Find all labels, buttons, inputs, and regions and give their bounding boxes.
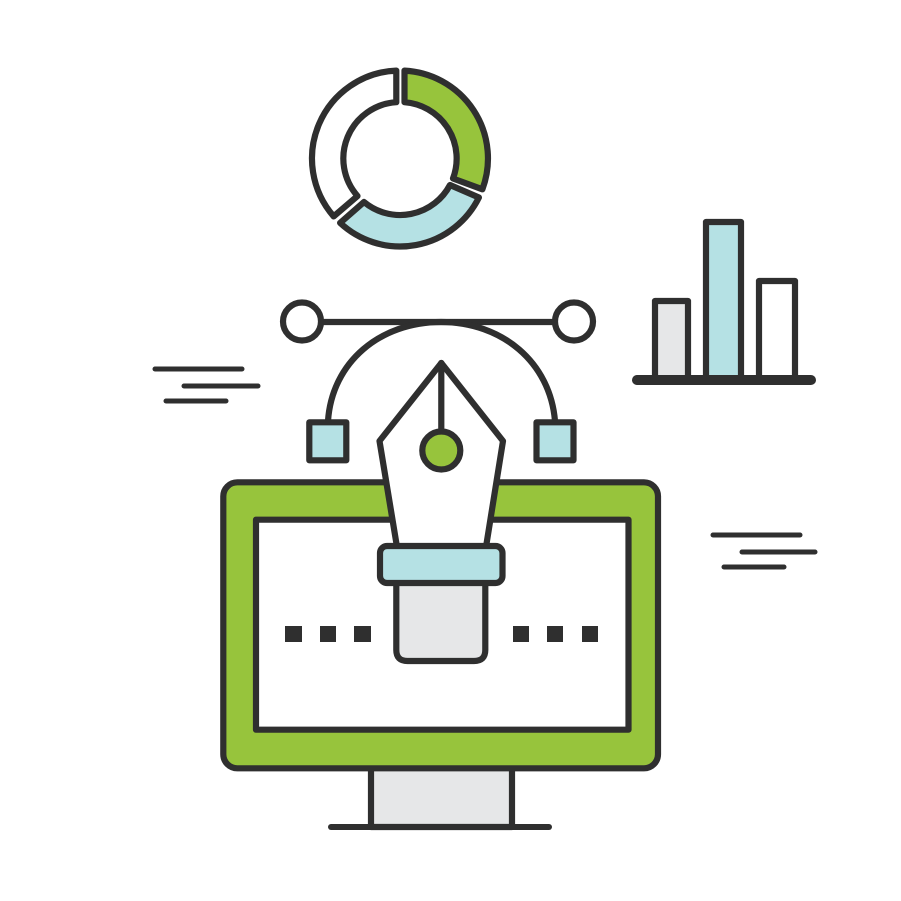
bar: grey (655, 301, 688, 379)
motion lines: right (713, 535, 815, 567)
motion lines: left (155, 369, 258, 401)
monitor screen (256, 520, 628, 730)
donut segment: light blue (340, 185, 479, 246)
handle node: right (555, 302, 593, 340)
pen nib tool (380, 363, 503, 661)
nib hole (422, 432, 460, 470)
monitor bezel (223, 482, 658, 768)
nib slit (438, 363, 444, 431)
donut segment: green (404, 71, 488, 189)
handle node: left (283, 302, 321, 340)
monitor stand (371, 767, 512, 827)
pen collar (380, 546, 502, 583)
bar chart (637, 222, 811, 380)
pen nib (380, 363, 503, 547)
monitor (223, 482, 658, 827)
pen barrel (396, 582, 485, 661)
handle line (322, 319, 554, 325)
bezier handle (283, 302, 593, 460)
anchor square: right (536, 422, 574, 460)
bar chart baseline (637, 375, 811, 385)
bar: light blue (706, 222, 741, 379)
anchor square: left (309, 422, 346, 460)
screen dots: left (285, 626, 371, 642)
monitor foot (331, 824, 549, 830)
donut chart (312, 71, 488, 246)
screen dots: right (513, 626, 598, 642)
donut segment: white (312, 71, 396, 216)
bar: white (759, 281, 795, 379)
bezier curve (328, 322, 555, 421)
